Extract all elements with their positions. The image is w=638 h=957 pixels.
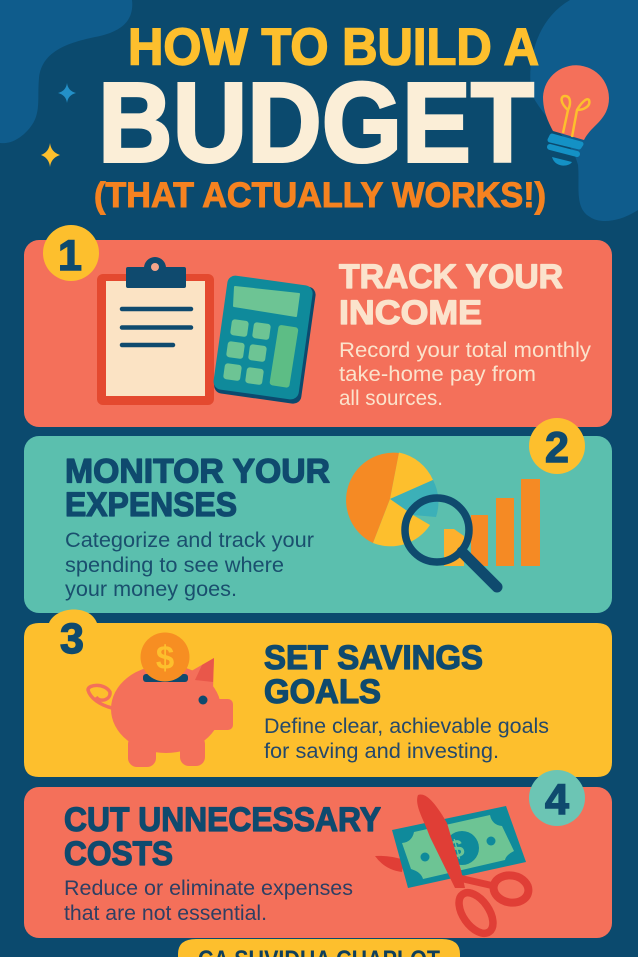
icon: coin xyxy=(140,632,190,682)
title line: how to build a: HOW TO BUILD A xyxy=(128,18,539,76)
icon: yellow sparkle xyxy=(41,143,60,167)
icon: dollar bill and scissors: $ xyxy=(447,834,467,865)
description: Categorize and track your xyxy=(65,529,314,552)
description: take-home pay from xyxy=(339,363,536,386)
icon: piggy bank xyxy=(88,632,233,767)
icon: coin: $ xyxy=(156,639,174,676)
panel: track your income xyxy=(24,225,612,427)
description xyxy=(339,339,592,410)
step badge 1: 1 xyxy=(58,232,82,280)
description xyxy=(64,877,353,925)
step badge 4 xyxy=(529,770,585,826)
icon: magnifying glass xyxy=(405,498,497,587)
description: that are not essential. xyxy=(64,902,267,925)
step badge 2 xyxy=(529,418,585,474)
heading: SET SAVINGS xyxy=(264,639,483,677)
footer author pill xyxy=(178,939,460,957)
title xyxy=(94,18,546,215)
heading xyxy=(264,639,483,711)
description: Reduce or eliminate expenses xyxy=(64,877,353,900)
heading xyxy=(339,258,563,332)
heading: MONITOR YOUR xyxy=(65,452,330,490)
title line: budget: BUDGET xyxy=(98,60,534,186)
description: spending to see where xyxy=(65,554,284,577)
icon: blue sparkle xyxy=(58,83,76,103)
title line: that actually works: (THAT ACTUALLY WORKS!) xyxy=(94,176,546,215)
heading: TRACK YOUR xyxy=(339,258,563,296)
heading: INCOME xyxy=(339,294,482,332)
panel: set savings goals xyxy=(24,609,612,777)
background blob: top left xyxy=(0,0,132,143)
description: your money goes. xyxy=(65,578,237,601)
heading xyxy=(64,801,381,873)
heading: GOALS xyxy=(264,673,381,711)
icon: clipboard xyxy=(97,257,214,405)
icon: pie chart xyxy=(346,452,438,546)
background blob: top right xyxy=(530,0,638,221)
description xyxy=(65,529,314,601)
icon: dollar bill and scissors xyxy=(375,795,531,939)
icon: calculator xyxy=(212,275,317,405)
description: all sources. xyxy=(339,387,443,410)
description: Record your total monthly xyxy=(339,339,592,362)
icon: light bulb xyxy=(543,65,609,166)
step badge 3: 3 xyxy=(60,615,84,663)
heading xyxy=(65,452,330,524)
heading: COSTS xyxy=(64,835,173,873)
step badge 2: 2 xyxy=(545,424,569,472)
description xyxy=(264,715,549,763)
description: for saving and investing. xyxy=(264,740,499,763)
bar chart xyxy=(444,479,540,566)
description: Define clear, achievable goals xyxy=(264,715,549,738)
heading: CUT UNNECESSARY xyxy=(64,801,381,839)
heading: EXPENSES xyxy=(65,486,237,524)
panel: cut unnecessary costs xyxy=(24,770,612,939)
step badge 1 xyxy=(43,225,99,281)
panel: monitor your expenses xyxy=(24,418,612,613)
step badge 4: 4 xyxy=(545,776,569,824)
